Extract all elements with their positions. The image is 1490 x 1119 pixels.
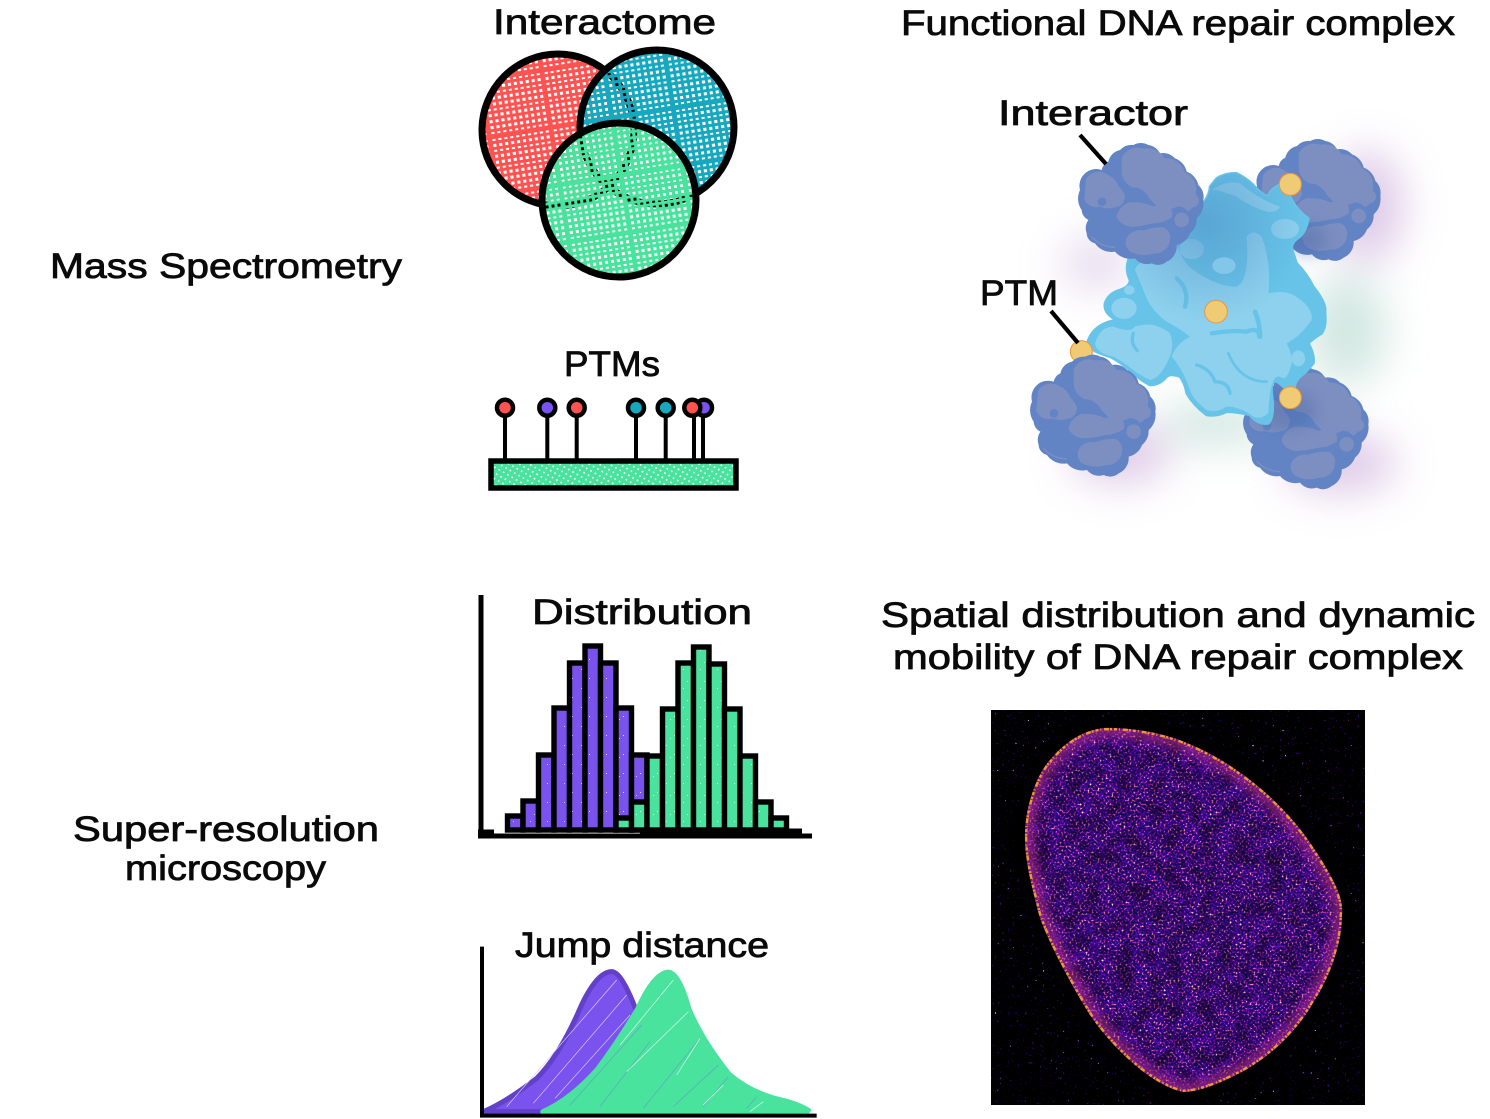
venn circle: teal bbox=[580, 50, 734, 204]
heading: Spatial distribution and dynamic mobility of DNA repair complex bbox=[881, 596, 1475, 677]
heading: Interactome: Interactome bbox=[493, 3, 716, 42]
density chart: jump distance bbox=[482, 947, 817, 1116]
sketch lines on green bbox=[570, 1025, 757, 1108]
interactor: bottom left bbox=[1030, 355, 1156, 477]
heading: Functional DNA repair complex: Functional DNA repair complex bbox=[901, 4, 1456, 43]
density axes bbox=[482, 947, 817, 1116]
background speckle bbox=[991, 710, 1365, 1105]
heading: Super-resolution microscopy bbox=[73, 810, 379, 888]
black image background bbox=[991, 710, 1365, 1105]
heading: Spatial distribution and dynamic mobility of DNA repair complex: mobility of DNA repair complex bbox=[893, 638, 1464, 677]
heading: Spatial distribution and dynamic mobility of DNA repair complex: Spatial distribution and dynamic bbox=[881, 596, 1475, 635]
soft glows bbox=[1060, 150, 1403, 493]
purple density curve bbox=[483, 972, 637, 1112]
heading: PTMs: PTMs bbox=[564, 345, 660, 384]
interactor: bottom right bbox=[1243, 367, 1369, 489]
heading: Super-resolution microscopy: Super-resolution bbox=[73, 810, 379, 849]
nucleus fill bbox=[1024, 728, 1342, 1092]
label: PTM: PTM bbox=[980, 274, 1058, 313]
PTM dot: bottom right bbox=[1279, 387, 1301, 409]
heading: Super-resolution microscopy: microscopy bbox=[125, 849, 327, 888]
leader line: PTM bbox=[1051, 311, 1078, 343]
interactor: top left bbox=[1078, 143, 1204, 265]
protein bar bbox=[491, 461, 736, 488]
heading: Mass Spectrometry: Mass Spectrometry bbox=[50, 247, 403, 286]
PTM dot: top right bbox=[1279, 173, 1301, 195]
white sketch lines on purple bbox=[507, 980, 630, 1107]
histogram chart bbox=[478, 595, 812, 836]
PTM stems bbox=[505, 408, 703, 461]
venn circle: green bbox=[542, 123, 696, 277]
venn diagram: interactome bbox=[482, 50, 734, 277]
nucleus dark margin bbox=[1025, 728, 1342, 1092]
PTM lollipop diagram bbox=[491, 400, 736, 488]
protein complex illustration bbox=[1030, 139, 1403, 493]
microscopy image: nucleus bbox=[991, 710, 1365, 1105]
venn circle: red bbox=[482, 54, 634, 206]
DNA repair protein body bbox=[1087, 173, 1325, 424]
green density curve bbox=[542, 971, 810, 1113]
label: Interactor: Interactor bbox=[998, 94, 1188, 133]
heading: Jump distance: Jump distance bbox=[515, 926, 769, 965]
heading: Distribution: Distribution bbox=[532, 593, 752, 632]
PTM pins bbox=[497, 400, 712, 416]
leader line: Interactor bbox=[1080, 135, 1106, 164]
PTM dot: centre bbox=[1205, 300, 1227, 323]
body shadow on interactors bbox=[1257, 223, 1327, 430]
purple histogram bars bbox=[508, 646, 647, 830]
green histogram bars bbox=[616, 647, 786, 830]
interactor: top right bbox=[1255, 139, 1381, 261]
histogram axes bbox=[478, 595, 812, 836]
PTM dot: left bbox=[1070, 341, 1092, 363]
